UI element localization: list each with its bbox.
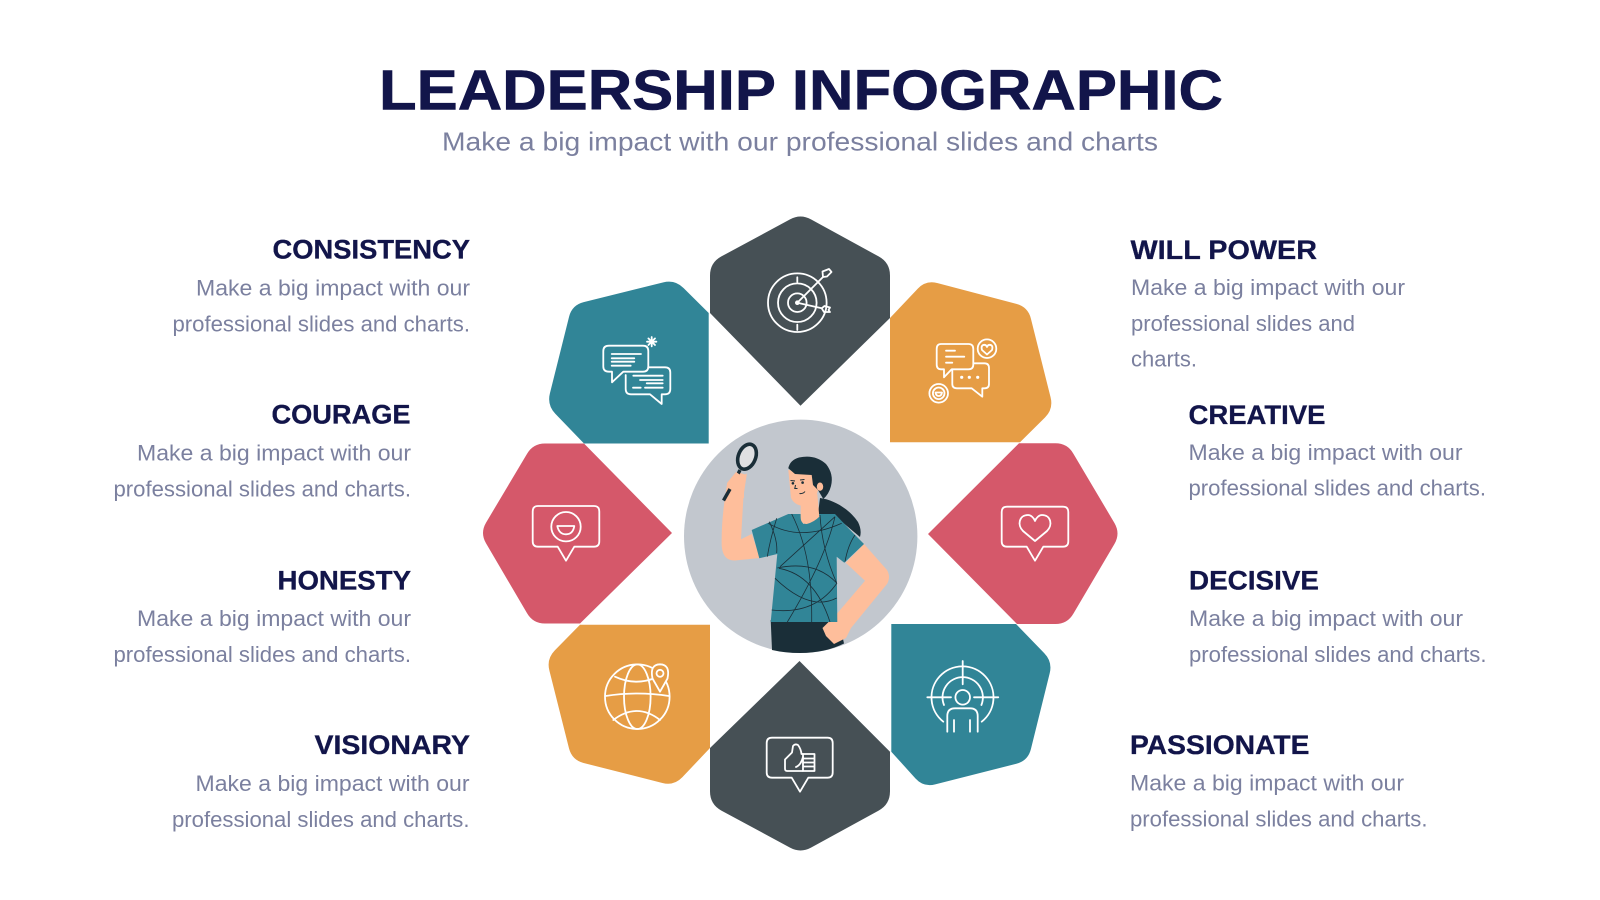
magnifier handle end: [724, 489, 730, 500]
ear: [817, 482, 823, 491]
description: creative: Make a big impact with our: [1188, 440, 1462, 465]
heading: visionary: VISIONARY: [314, 730, 470, 760]
panel: top dark petal: [710, 217, 890, 406]
panel: lower-left orange petal: [549, 625, 710, 784]
description: decisive: professional slides and charts.: [1189, 642, 1486, 667]
panel: upper-left teal petal: [549, 282, 709, 444]
description: passionate: [1130, 770, 1428, 832]
description: consistency: professional slides and charts.: [172, 312, 470, 336]
heading: creative: CREATIVE: [1188, 400, 1326, 430]
icon: target with arrows: [768, 269, 832, 332]
description: honesty: Make a big impact with our: [137, 606, 411, 631]
panel: right red petal: [928, 443, 1118, 624]
panel: passionate text: [1130, 730, 1428, 832]
description: visionary: professional slides and charts.: [172, 807, 469, 832]
subtitle: Make a big impact with our professional slides and charts: [442, 126, 1158, 156]
heading: consistency: CONSISTENCY: [272, 234, 470, 264]
panel: honesty text: [114, 566, 411, 667]
heading: courage: COURAGE: [272, 400, 410, 430]
pants: [771, 620, 844, 653]
icon: thumbs up speech bubble: [767, 738, 833, 792]
icon: chat bubbles: [603, 337, 670, 404]
title: LEADERSHIP INFOGRAPHIC: [379, 58, 1223, 122]
description: creative: professional slides and charts.: [1188, 476, 1486, 500]
description: courage: professional slides and charts.: [114, 476, 411, 502]
ponytail: [818, 498, 861, 537]
icon: smile speech bubble: [533, 506, 599, 561]
panel: courage text: [114, 400, 411, 502]
description: honesty: professional slides and charts.: [114, 642, 411, 667]
description: passionate: Make a big impact with our: [1130, 770, 1404, 796]
description: will power: charts.: [1131, 346, 1197, 372]
heading: passionate: PASSIONATE: [1130, 730, 1310, 760]
description: courage: [114, 440, 411, 502]
icon: conversation with heart and smiley: [929, 339, 996, 403]
panel: upper-right orange petal: [890, 282, 1051, 442]
heading: honesty: HONESTY: [278, 566, 411, 596]
illustration: leader with magnifying glass in circle: [684, 420, 917, 653]
description: courage: Make a big impact with our: [137, 440, 411, 466]
raised arm: [722, 472, 760, 561]
panel: lower-right teal petal: [891, 624, 1050, 785]
icon: heart speech bubble: [1002, 507, 1068, 561]
heading: will power: WILL POWER: [1130, 235, 1317, 265]
icon: crosshair on person: [927, 661, 998, 732]
panel: left red petal: [483, 444, 672, 624]
magnifying glass: [734, 441, 760, 480]
shirt with scribble pattern: [752, 514, 864, 622]
neck: [801, 494, 819, 524]
hair: [788, 457, 832, 499]
panel: will power text: [1130, 235, 1405, 372]
circle background: [684, 420, 917, 653]
description: consistency: [172, 276, 470, 336]
icon: globe with location pin: [605, 664, 670, 729]
panel: visionary text: [172, 730, 470, 832]
description: creative: [1188, 440, 1486, 500]
description: decisive: Make a big impact with our: [1189, 606, 1463, 631]
hand on magnifier: [727, 472, 747, 498]
description: will power: Make a big impact with our: [1131, 275, 1405, 300]
heading: decisive: DECISIVE: [1189, 566, 1319, 596]
description: visionary: Make a big impact with our: [196, 771, 470, 796]
eyes: [792, 481, 804, 485]
description: decisive: [1189, 606, 1486, 667]
description: will power: professional slides and: [1131, 311, 1355, 336]
description: will power: [1131, 275, 1405, 372]
panel: decisive text: [1189, 566, 1486, 667]
description: visionary: [172, 771, 470, 832]
panel: consistency text: [172, 234, 470, 336]
panel: creative text: [1188, 400, 1486, 500]
other arm and hand: [822, 544, 889, 644]
description: honesty: [114, 606, 411, 667]
face: [788, 470, 818, 506]
description: consistency: Make a big impact with our: [196, 276, 470, 300]
description: passionate: professional slides and charts.: [1130, 806, 1428, 832]
panel: bottom dark petal: [710, 661, 890, 850]
facial features: [790, 480, 805, 494]
